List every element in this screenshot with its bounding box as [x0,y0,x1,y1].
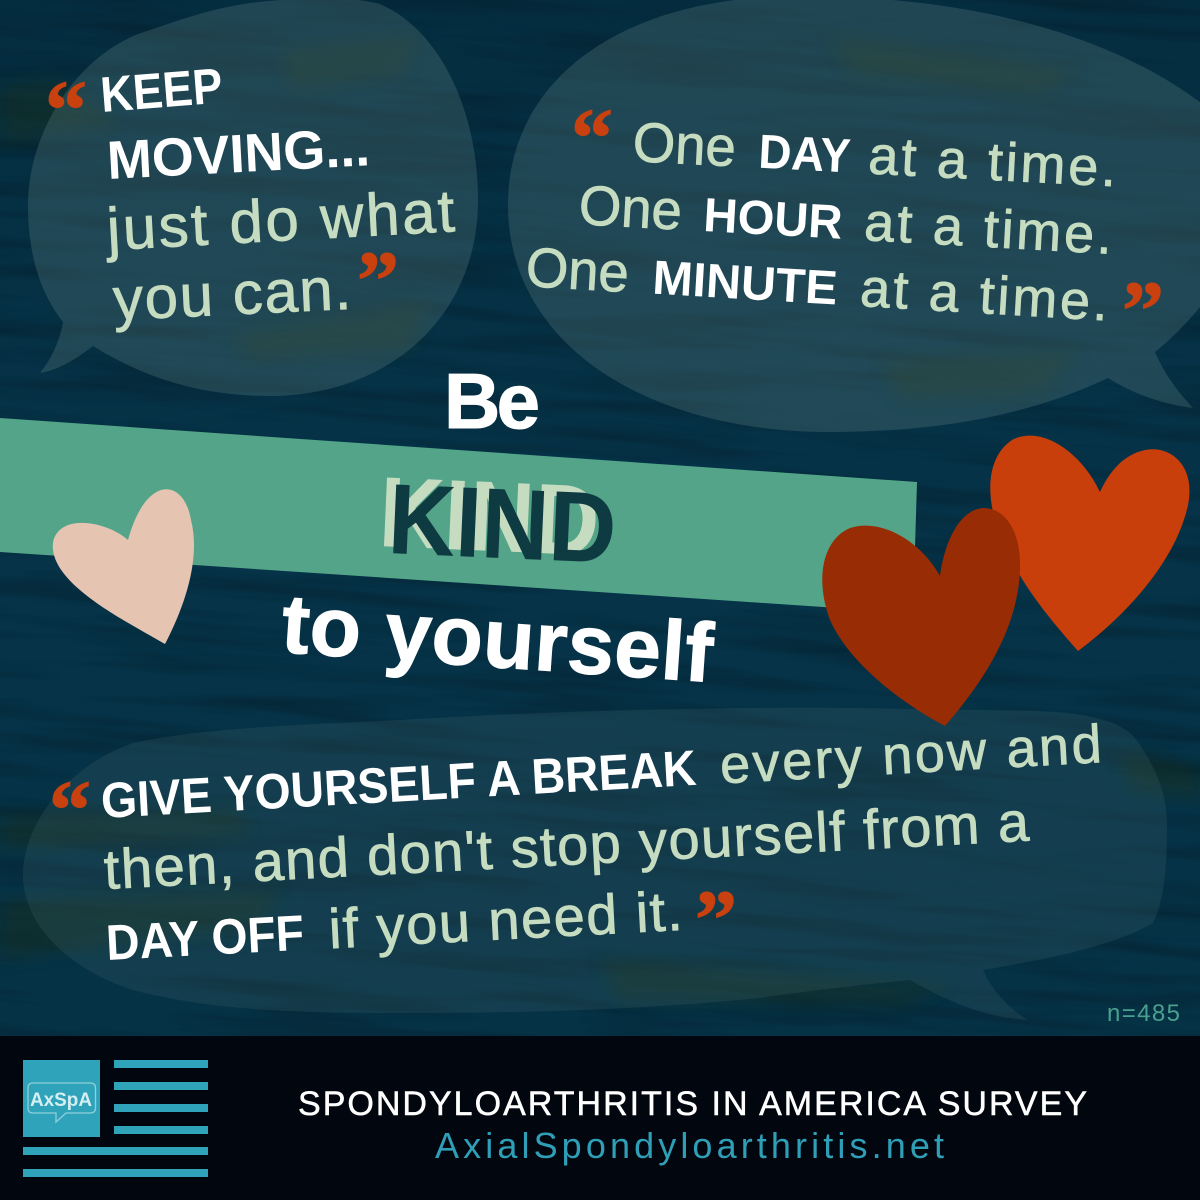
closing quote mark: ” [695,874,737,967]
quote text: one day, one hour, one minute: HOUR [702,189,844,250]
opening quote mark: “ [571,92,613,185]
quote text: give yourself a break [99,714,1103,972]
quote text: keep moving [98,58,457,333]
quote text: give yourself a break: if you need it. [327,879,684,960]
speech bubble: one day at a time [508,0,1200,432]
logo: AxSpA flag [23,1060,208,1177]
bubble shape [508,0,1200,432]
sample size note: n=485 [1107,1000,1180,1027]
opening quote mark: “ [45,64,87,157]
closing quote mark: ” [357,235,399,328]
speech bubble: give yourself a break [23,708,1167,1020]
heading: be kind to yourself [279,357,717,700]
icon: dark red heart [822,508,1020,726]
banner: green band [0,418,917,613]
icon: orange heart [990,436,1189,651]
quote text: give yourself a break: GIVE YOURSELF A BREAK [99,740,698,829]
quote text: one day, one hour, one minute: at a time. [859,258,1110,333]
logo: AxSpA flag: AxSpA [30,1089,92,1111]
quote text: one day, one hour, one minute: at a time. [863,192,1114,266]
quote text: one day, one hour, one minute: MINUTE [651,252,839,315]
quote text: give yourself a break: then, and don't stop yourself from a [102,790,1031,901]
closing quote mark: ” [1122,265,1164,358]
quote text: one day, one hour, one minute: One [524,235,631,304]
quote text: one day, one hour, one minute: at a time. [867,125,1118,198]
quote text: keep moving: just do what [103,177,457,263]
icon: pink heart [53,489,194,644]
quote text: keep moving: you can. [111,255,352,333]
footer band [0,1036,1200,1200]
quote text: give yourself a break: every now and [718,714,1103,795]
quote text: one day, one hour, one minute [524,110,1118,333]
heading word: Be: Be [444,357,540,445]
quote text: one day, one hour, one minute: One [577,173,684,242]
speech bubble: keep moving [28,0,478,396]
quote text: give yourself a break: DAY OFF [105,905,305,971]
footer url: AxialSpondyloarthritis.net [435,1125,944,1166]
heading word: KIND: KIND [386,463,619,585]
quote text: one day, one hour, one minute: One [631,110,738,178]
bubble shape [28,0,478,396]
opening quote mark: “ [49,764,91,857]
footer title: SPONDYLOARTHRITIS IN AMERICA SURVEY [298,1085,1087,1123]
quote text: one day, one hour, one minute: DAY [757,126,852,183]
heading word: KIND: KIND [377,456,602,578]
heading words: to yourself: to yourself [279,576,717,700]
bubble shape [23,708,1167,1020]
quote text: keep moving: MOVING... [105,117,371,191]
quote text: keep moving: KEEP [98,58,224,123]
